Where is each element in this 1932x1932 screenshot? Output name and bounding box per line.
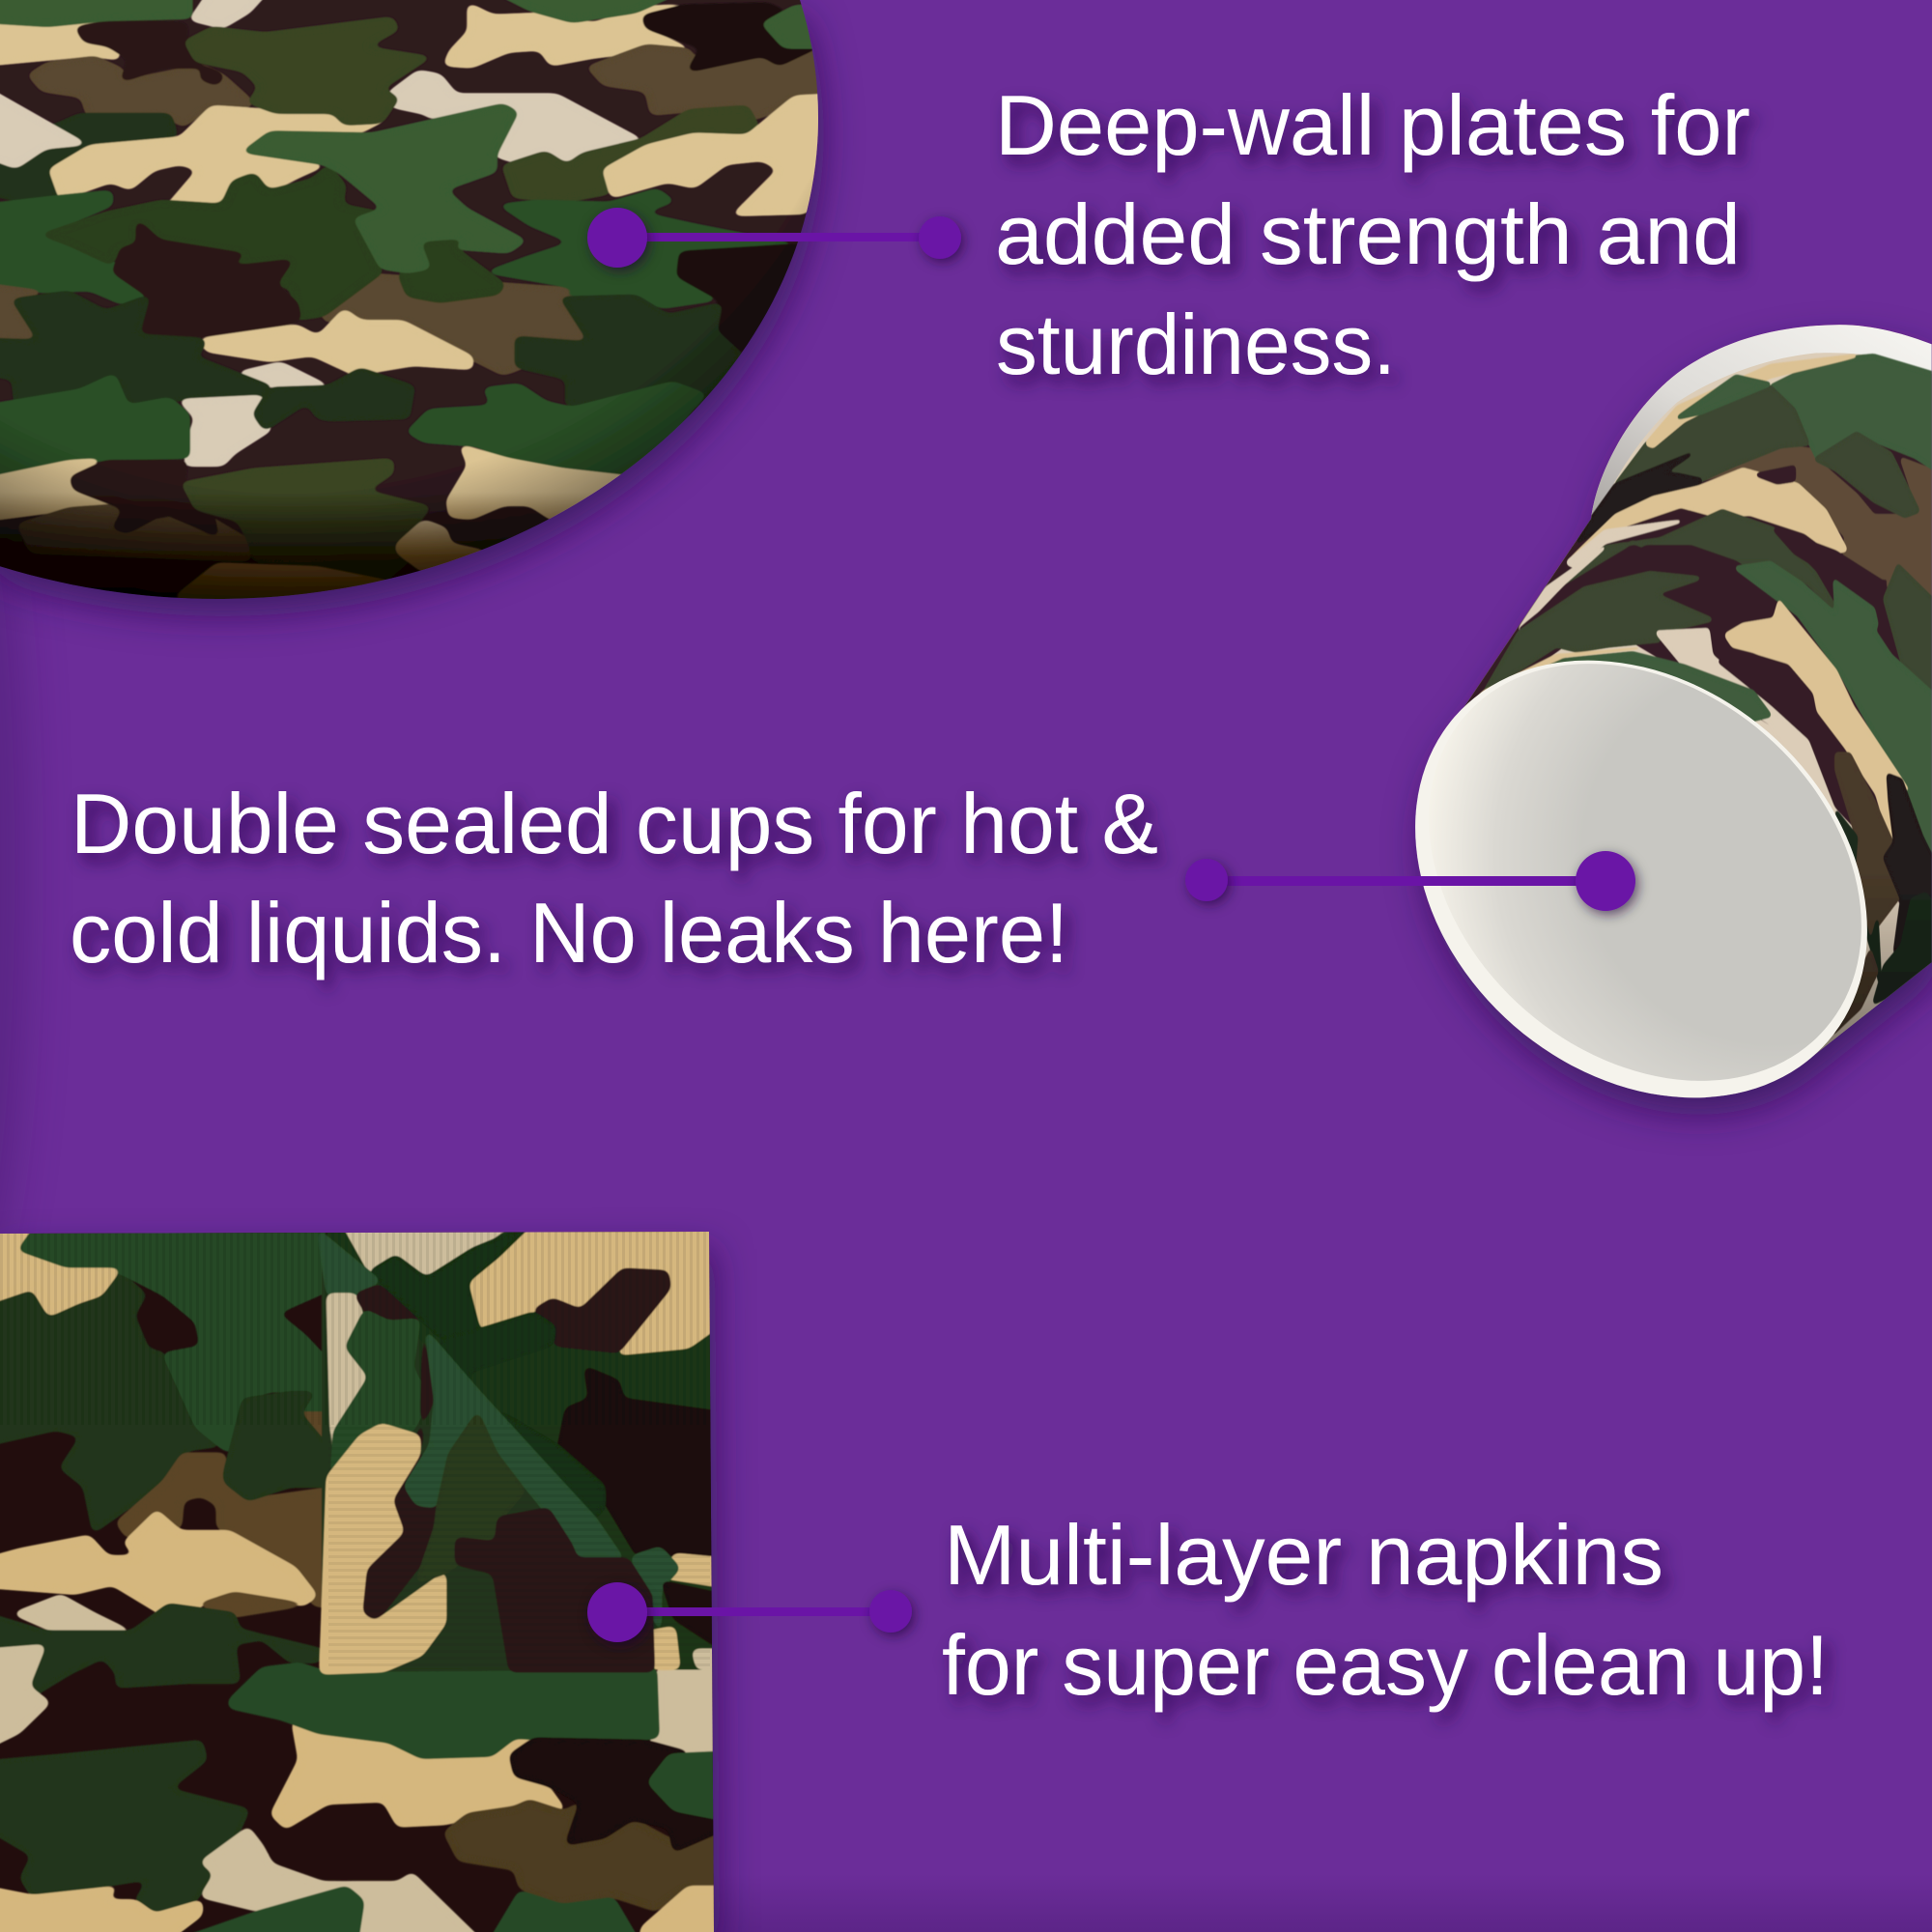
cup outer dot	[1185, 859, 1228, 901]
napkin vertical ribbing	[0, 1232, 348, 1425]
plate rim shading	[0, 191, 811, 599]
text: deep-wall plates: sturdiness.	[996, 297, 1396, 392]
plate base colour	[0, 0, 831, 618]
cup side	[1463, 323, 1932, 1086]
text: multi-layer napkins	[942, 1507, 1829, 1713]
plate inner dot	[587, 208, 647, 268]
cup side base colour	[1463, 325, 1932, 1086]
cup inner dot	[1576, 851, 1635, 911]
text: multi-layer napkins: Multi-layer napkins	[944, 1507, 1663, 1603]
cup base inner face	[1346, 578, 1932, 1167]
background left edge vignette	[0, 454, 29, 1285]
plate lower shading	[0, 496, 588, 599]
napkin leader line	[617, 1607, 891, 1616]
napkin inner dot	[587, 1582, 647, 1642]
napkin right ribbing	[348, 1232, 710, 1425]
cup base outer lip	[1327, 570, 1932, 1188]
cup camouflage pattern	[1450, 355, 1932, 1034]
napkin outer dot	[869, 1590, 912, 1633]
napkin camouflage pattern	[0, 1222, 725, 1932]
plate leader line	[617, 233, 940, 242]
plate	[0, 0, 838, 618]
background bottom edge vignette	[0, 1874, 1932, 1932]
text: multi-layer napkins: for super easy clean up!	[942, 1617, 1829, 1713]
napkin right-hand layer	[327, 1224, 724, 1668]
text: double sealed cups	[70, 776, 1158, 980]
text: deep-wall plates: added strength and	[995, 186, 1741, 282]
callout: napkin	[587, 1582, 912, 1642]
cup	[1402, 323, 1932, 1134]
callout: cup	[1185, 851, 1635, 911]
napkin fold ribbing	[328, 1425, 710, 1666]
cup top rim	[1591, 325, 1932, 519]
plate camouflage pattern	[0, 0, 838, 608]
text: double sealed cups: cold liquids. No leaks here!	[70, 885, 1068, 980]
callout: plate	[587, 208, 961, 268]
napkin	[0, 1222, 725, 1932]
napkin base colour	[0, 1227, 720, 1932]
plate outer dot	[919, 216, 961, 259]
cup leader line	[1207, 876, 1605, 886]
text: deep-wall plates	[995, 77, 1750, 392]
text: deep-wall plates: Deep-wall plates for	[995, 77, 1750, 173]
text: double sealed cups: Double sealed cups for hot &	[71, 776, 1158, 871]
cup side shading	[1815, 900, 1932, 1059]
napkin folded triangle	[323, 1236, 653, 1671]
plate surface	[0, 0, 838, 618]
